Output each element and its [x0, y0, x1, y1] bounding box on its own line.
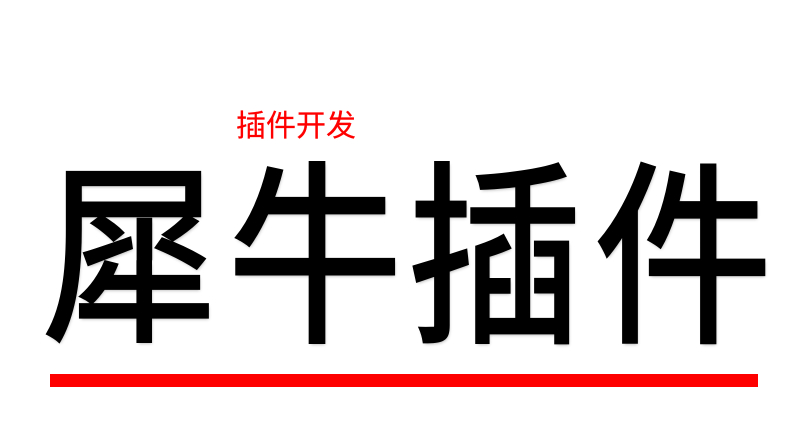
subtitle: 插件开发 — [236, 110, 356, 143]
title: 犀 — [43, 149, 217, 368]
title — [43, 149, 772, 368]
red underline bar — [50, 374, 758, 387]
title: 件 — [594, 149, 772, 368]
title: 牛 — [227, 149, 402, 368]
title: 插 — [408, 149, 582, 368]
